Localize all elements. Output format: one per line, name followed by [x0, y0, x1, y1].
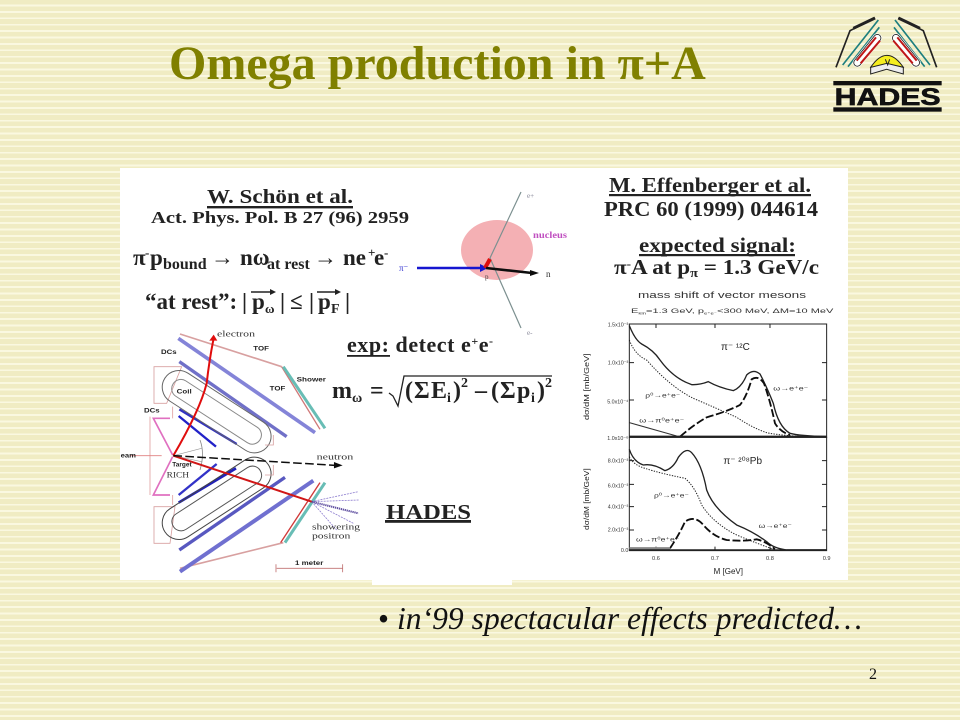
- chart: dilepton spectra: =1.3 GeV, p: [646, 308, 704, 315]
- equation: at rest condition: |: [280, 289, 285, 314]
- diagram: nucleus reaction: e-: [527, 329, 533, 337]
- text block: expected signal: -: [627, 257, 631, 271]
- diagram: nucleus reaction: e+: [527, 192, 534, 200]
- label: HADES: HADES: [386, 500, 471, 524]
- bullet text: • in‘99 spectacular effects predicted…: [378, 601, 862, 636]
- equation: invariant mass: 2: [545, 376, 552, 391]
- equation: at rest condition: |: [309, 289, 314, 314]
- icon: HADES logo: HADES: [835, 84, 941, 111]
- equation: invariant mass: Σ: [414, 378, 430, 404]
- chart x axis: [652, 556, 831, 576]
- equation: reaction: bound: [163, 256, 207, 273]
- diagram: HADES spectrometer: Target: [172, 462, 193, 469]
- equation: at rest condition: F: [331, 302, 340, 317]
- chart x axis: 0.8: [766, 556, 774, 562]
- diagram: HADES spectrometer: Shower: [297, 376, 327, 383]
- diagram: HADES spectrometer: TOF: [253, 346, 269, 353]
- diagram: HADES spectrometer: eam: [121, 453, 136, 460]
- equation: at rest condition: ≤: [290, 289, 303, 314]
- chart panel: pion lead: 6.0x10⁻³: [608, 484, 629, 490]
- equation: invariant mass: ): [453, 378, 461, 404]
- equation: invariant mass: ): [537, 378, 545, 404]
- equation: at rest condition: |: [345, 289, 350, 314]
- heading: experiment: exp: detect e: [347, 332, 471, 357]
- figure panel: [120, 168, 848, 585]
- title: Omega production in π+A: [169, 37, 706, 90]
- equation: invariant mass: ω: [352, 391, 362, 406]
- chart panel: pion carbon: 5.0x10⁻⁴: [607, 399, 629, 405]
- text block: expected signal: expected signal:: [639, 233, 796, 257]
- diagram: nucleus reaction: π⁻: [399, 263, 409, 273]
- chart panel: pion carbon: ω→π⁰e⁺e⁻: [639, 416, 685, 424]
- text block: expected signal: π: [614, 255, 626, 279]
- caption: mass shift of vector mesons: mass shift of vector mesons: [638, 290, 807, 300]
- diagram: HADES spectrometer: 1 meter: [295, 560, 324, 567]
- diagram: HADES spectrometer: DCs: [144, 407, 160, 414]
- chart: dilepton spectra: [584, 308, 834, 576]
- equation: invariant mass: p: [517, 378, 530, 404]
- text block: expected signal: [614, 233, 819, 280]
- equation: invariant mass: 2: [461, 376, 468, 391]
- equation: reaction: +: [368, 245, 375, 260]
- equation: invariant mass: Σ: [500, 378, 516, 404]
- equation: reaction: →: [314, 245, 337, 270]
- icon: HADES logo: [833, 18, 942, 112]
- chart panel: pion carbon: [584, 322, 827, 442]
- chart: dilepton spectra: E: [631, 308, 635, 315]
- chart panel: pion carbon: ρ⁰→e⁺e⁻: [645, 391, 681, 399]
- equation: invariant mass: i: [447, 391, 451, 406]
- text block: Effenberger reference: [604, 173, 819, 221]
- page number: 2: [869, 666, 877, 683]
- diagram: HADES spectrometer: electron: [217, 329, 256, 339]
- equation: invariant mass: i: [531, 391, 535, 406]
- diagram: HADES spectrometer: showering: [312, 521, 361, 531]
- chart: dilepton spectra: e⁺e⁻: [704, 311, 717, 315]
- text block: expected signal: π: [690, 265, 698, 280]
- diagram: nucleus reaction: p: [485, 273, 489, 281]
- chart panel: pion carbon: ω→e⁺e⁻: [773, 386, 809, 393]
- chart panel: pion lead: 0.0: [621, 548, 628, 554]
- diagram: nucleus reaction: nucleus: [533, 231, 567, 241]
- text block: Effenberger reference: M. Effenberger et al.: [609, 173, 811, 197]
- chart panel: pion carbon: dσ/dM [mb/GeV]: [584, 353, 591, 420]
- text block: expected signal: A at p: [631, 255, 690, 279]
- diagram: HADES spectrometer: [121, 329, 361, 572]
- chart x axis: M [GeV]: [714, 567, 743, 576]
- heading: experiment: +: [471, 334, 478, 348]
- equation: at rest condition: p: [252, 289, 265, 314]
- chart panel: pion lead: ω→π⁰e⁺e⁻: [636, 536, 680, 544]
- chart x axis: 0.7: [711, 556, 719, 562]
- diagram: HADES spectrometer: RICH: [167, 469, 189, 479]
- diagram: HADES spectrometer: neutron: [317, 451, 354, 461]
- chart panel: pion lead: ω→e⁺e⁻: [759, 523, 793, 530]
- text block: Effenberger reference: PRC 60 (1999) 044614: [604, 197, 819, 221]
- equation: invariant mass: –: [474, 378, 488, 404]
- equation: invariant mass: [332, 376, 552, 406]
- chart x axis: 0.9: [823, 556, 831, 562]
- text block: expected signal: = 1.3 GeV/c: [698, 255, 819, 279]
- chart panel: pion carbon: 1.0x10⁻³: [608, 361, 629, 367]
- chart panel: pion lead: 2.0x10⁻³: [608, 528, 629, 534]
- diagram: HADES spectrometer: positron: [312, 530, 351, 540]
- equation: reaction: ne: [343, 245, 366, 270]
- equation: at rest condition: p: [318, 289, 331, 314]
- equation: at rest condition: [145, 289, 350, 317]
- diagram: HADES spectrometer: Coil: [177, 388, 192, 395]
- equation: invariant mass: m: [332, 378, 352, 404]
- panel background: [120, 168, 848, 585]
- equation: invariant mass: (: [405, 378, 413, 404]
- equation: at rest condition: |: [242, 289, 247, 314]
- equation: reaction: π: [133, 245, 146, 270]
- heading: experiment: e: [479, 332, 489, 357]
- equation: at rest condition: “at rest”:: [145, 289, 237, 314]
- diagram: nucleus reaction: [399, 192, 567, 337]
- chart panel: pion lead: [584, 437, 827, 554]
- text block: Schön reference: Act. Phys. Pol. B 27 (96) 2959: [151, 208, 409, 227]
- diagram: nucleus reaction: n: [546, 269, 551, 279]
- equation: reaction: -: [384, 245, 388, 260]
- chart panel: pion lead: 4.0x10⁻³: [608, 504, 629, 510]
- equation: at rest condition: ω: [265, 301, 275, 316]
- chart panel: pion carbon: π⁻ ¹²C: [721, 342, 750, 353]
- chart panel: pion lead: π⁻ ²⁰⁸Pb: [723, 456, 762, 467]
- text block: Schön reference: [151, 186, 409, 227]
- chart: dilepton spectra: <300 MeV, ΔM=10 MeV: [717, 308, 834, 315]
- chart panel: pion lead: ρ⁰→e⁺e⁻: [654, 491, 690, 499]
- chart panel: pion carbon: 1.0x10⁻⁶: [607, 436, 628, 442]
- equation: invariant mass: (: [491, 378, 499, 404]
- chart panel: pion lead: 8.0x10⁻³: [608, 459, 629, 465]
- diagram: HADES spectrometer: TOF: [270, 386, 285, 393]
- equation: invariant mass: =: [370, 378, 384, 404]
- equation: reaction: e: [374, 245, 384, 270]
- equation: reaction: →: [211, 245, 234, 270]
- text block: Schön reference: W. Schön et al.: [207, 186, 353, 208]
- chart panel: pion lead: dσ/dM [mb/GeV]: [584, 468, 591, 530]
- heading: experiment: -: [489, 334, 493, 348]
- chart panel: pion carbon: 1.5x10⁻³: [608, 322, 629, 328]
- diagram: HADES spectrometer: DCs: [161, 349, 177, 356]
- equation: invariant mass: E: [431, 378, 447, 404]
- equation: reaction: nω: [240, 245, 270, 270]
- equation: reaction: at rest: [267, 256, 310, 273]
- equation: reaction: p: [150, 245, 163, 270]
- chart x axis: 0.6: [652, 556, 660, 562]
- chart: dilepton spectra: kin: [638, 311, 646, 315]
- equation: reaction: -: [145, 245, 149, 260]
